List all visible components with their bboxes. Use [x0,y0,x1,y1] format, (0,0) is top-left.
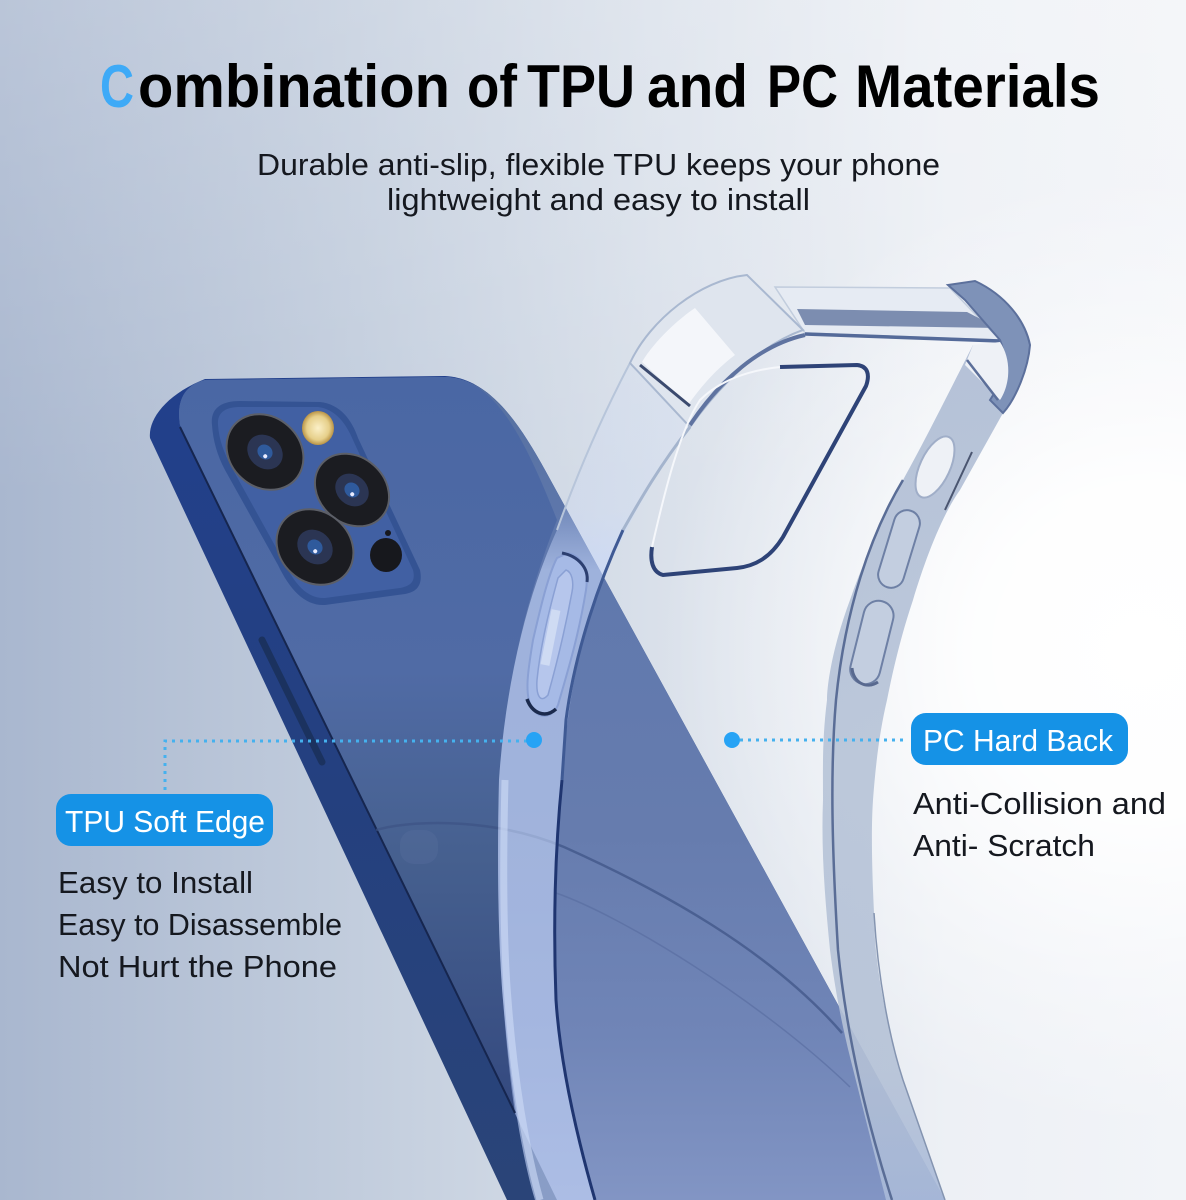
label: TPU Soft Edge [56,794,273,846]
subtitle: lightweight and easy to install [387,182,810,217]
reflection arcs [376,823,842,1033]
text: PC benefits [913,786,1166,863]
text: TPU benefits: Easy to Disassemble [58,907,342,942]
subtitle: Durable anti-slip, flexible TPU keeps your phone [257,147,940,182]
left rim [498,363,690,1200]
text: PC benefits: Anti- Scratch [913,828,1095,863]
clear case [498,275,1030,1200]
text: TPU benefits: Easy to Install [58,865,253,900]
title: Materials [855,53,1100,120]
title: TPU [527,53,635,120]
right corner bumper [948,281,1030,413]
top bar [775,287,1000,340]
title [100,53,1100,120]
side button [262,640,322,762]
right rim [822,345,1003,1200]
label: TPU Soft Edge: TPU Soft Edge [65,804,265,839]
left corner bumper [630,275,803,427]
phone body [150,376,945,1200]
callout line: PC [724,732,908,748]
text: TPU benefits [58,865,342,984]
text: PC benefits: Anti-Collision and [913,786,1166,821]
lenses [211,399,319,505]
label: PC Hard Back: PC Hard Back [923,723,1113,758]
left rim button cover [527,553,587,716]
title: of [467,53,518,120]
camera cutout [651,365,868,575]
title: PC [767,53,838,120]
title: C [100,53,134,120]
title: ombination [138,53,450,120]
subtitle [257,147,940,217]
callout line: TPU [165,732,542,790]
title: and [647,53,748,120]
label: PC Hard Back [911,713,1128,765]
text: TPU benefits: Not Hurt the Phone [58,949,337,984]
camera module [211,399,421,605]
right rim port and buttons [847,431,972,687]
